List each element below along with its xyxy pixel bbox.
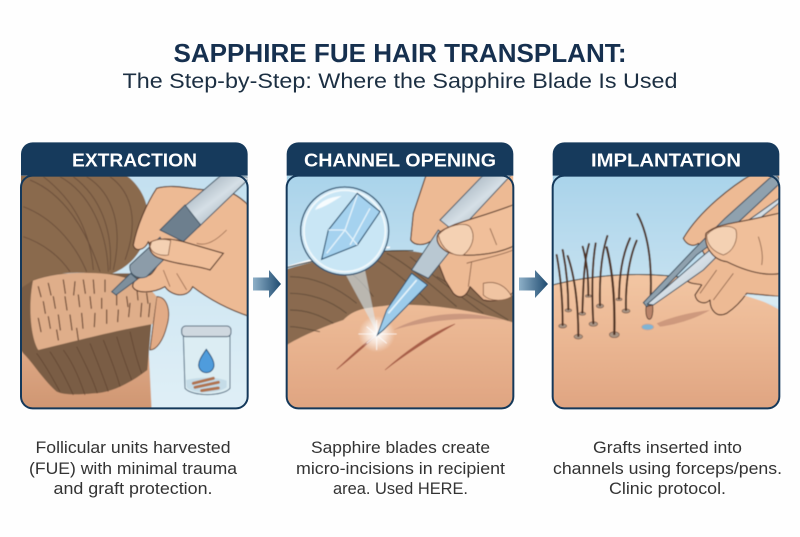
panel: implantation	[550, 142, 782, 410]
caption: channel opening: Sapphire blades create	[311, 438, 490, 457]
beam	[346, 270, 376, 329]
hand	[683, 173, 782, 315]
ear	[150, 297, 169, 350]
jar	[183, 335, 230, 395]
arrow 1	[253, 270, 281, 298]
pen	[112, 173, 250, 295]
upper hair	[18, 173, 148, 290]
caption: extraction	[29, 438, 238, 498]
forceps	[643, 173, 782, 307]
hand	[411, 173, 516, 301]
scalp skin	[288, 293, 512, 408]
panel heading: extraction: EXTRACTION	[72, 150, 197, 170]
thumb	[437, 204, 516, 255]
panel: channel opening	[284, 142, 516, 410]
caption: extraction: Follicular units harvested	[36, 438, 230, 457]
caption: implantation: Grafts inserted into	[593, 438, 742, 457]
thumb	[706, 213, 782, 274]
neck	[22, 350, 152, 408]
header bar	[287, 142, 513, 176]
stubble hairs	[38, 280, 150, 340]
graft bulb	[646, 305, 653, 319]
open channel	[642, 324, 654, 330]
caption: extraction: and graft protection.	[54, 479, 212, 498]
hair grafts	[557, 214, 651, 336]
caption: implantation: Clinic protocol.	[609, 479, 726, 498]
title: SAPPHIRE FUE HAIR TRANSPLANT:	[174, 38, 626, 68]
scalp skin	[550, 274, 782, 410]
caption: implantation: channels using forceps/pens.	[553, 459, 782, 478]
magnifier	[301, 187, 389, 275]
incisions	[336, 338, 372, 370]
header bar	[553, 142, 779, 176]
follicle sockets	[559, 295, 630, 339]
caption: channel opening: area. Used HERE.	[333, 479, 468, 498]
subtitle: The Step-by-Step: Where the Sapphire Blade Is Used	[122, 69, 678, 93]
caption: channel opening	[296, 438, 505, 498]
panel heading: channel opening: CHANNEL OPENING	[304, 150, 496, 170]
panel: extraction	[18, 142, 250, 410]
header bar	[21, 142, 248, 176]
shaved donor band	[30, 273, 157, 350]
panel heading: implantation: IMPLANTATION	[591, 150, 741, 170]
hand	[133, 186, 250, 317]
caption: channel opening: micro-incisions in recipient	[296, 459, 505, 478]
hair	[284, 251, 516, 347]
scalpel	[377, 173, 513, 335]
sparkle	[360, 317, 394, 351]
caption: extraction: (FUE) with minimal trauma	[29, 459, 238, 478]
arrow 2	[519, 270, 548, 298]
caption: implantation	[553, 438, 782, 498]
lower hair	[18, 273, 152, 394]
thumb	[150, 239, 223, 270]
